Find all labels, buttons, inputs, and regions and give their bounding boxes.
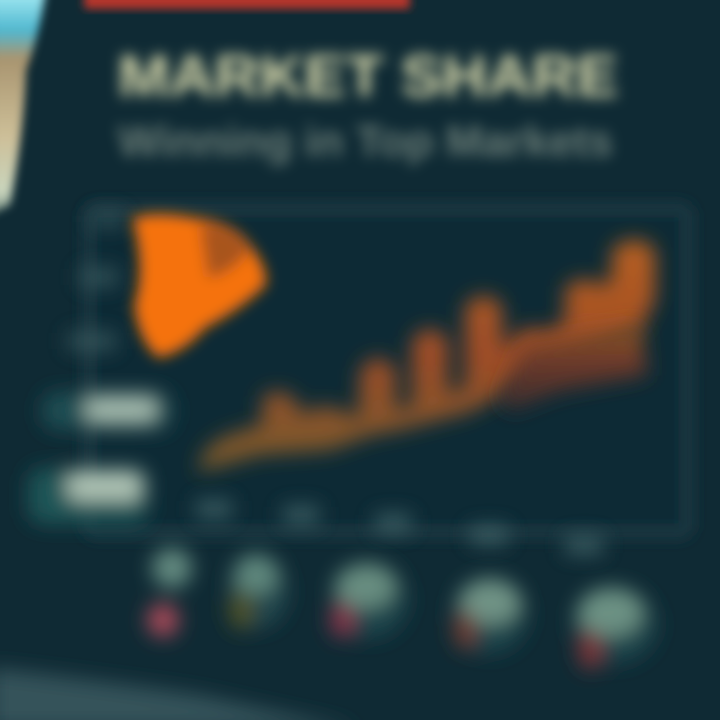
- legend pill two: [28, 468, 148, 524]
- photo corner accent: [0, 0, 46, 215]
- legend pill one: [42, 392, 172, 430]
- right lower columns: [500, 325, 648, 412]
- y axis labels: [68, 212, 124, 350]
- gauge four: [452, 577, 528, 653]
- gauge five: [573, 587, 657, 670]
- top red bar: [84, 0, 410, 9]
- title: MARKET SHARE: [118, 44, 618, 109]
- subtitle: Winning in Top Markets: [118, 117, 613, 166]
- orange map shape: [132, 214, 266, 358]
- bottom caption strip: [0, 668, 360, 720]
- chart columns: [198, 240, 655, 472]
- gauge three: [330, 562, 408, 638]
- gauge two: [228, 554, 288, 630]
- panel: chart: [28, 208, 688, 554]
- x axis labels: [196, 500, 603, 554]
- map notch: [200, 225, 250, 278]
- gauges row: [147, 548, 657, 670]
- gauge one: [147, 548, 192, 637]
